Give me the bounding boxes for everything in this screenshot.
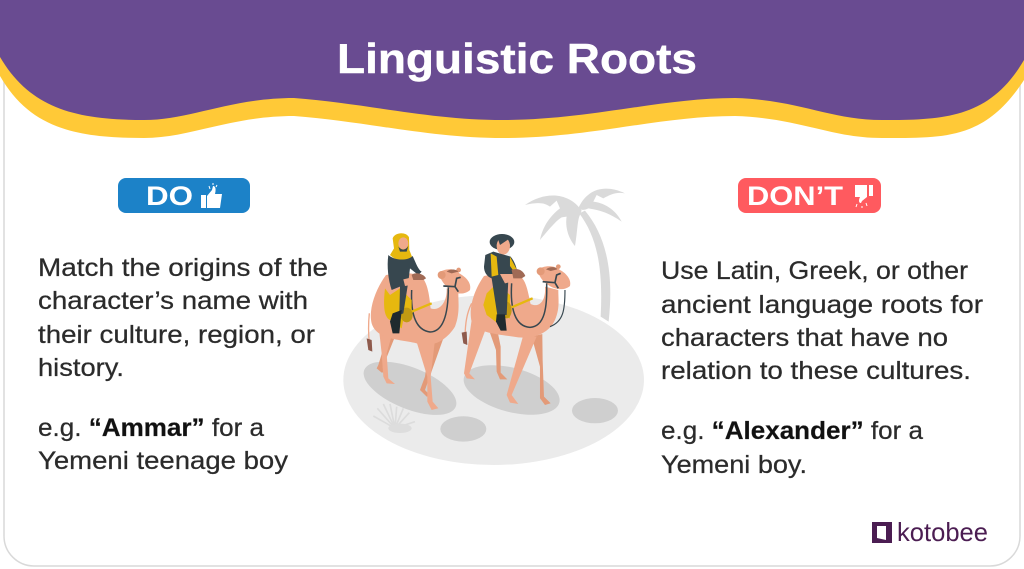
illustration: camel riders in the desert (343, 189, 644, 465)
don't text (661, 257, 983, 385)
palm tree (525, 189, 625, 322)
desert grass (373, 404, 415, 433)
don't text: relation to these cultures. (661, 357, 971, 385)
header wave (0, 0, 1024, 138)
rider left (388, 233, 426, 333)
don't example: e.g. “Alexander” for a (661, 417, 923, 445)
icon: book (872, 522, 892, 543)
do text: their culture, region, or (38, 321, 315, 349)
shadows and rocks (357, 351, 618, 442)
camel left (367, 268, 470, 410)
icon: thumbs up (201, 183, 222, 208)
don't example: Yemeni boy. (661, 451, 807, 479)
do example (38, 414, 289, 475)
title: Linguistic Roots (337, 35, 697, 82)
don't text: characters that have no (661, 324, 948, 352)
do example: e.g. “Ammar” for a (38, 414, 264, 442)
logo: kotobee: kotobee (897, 517, 988, 547)
don't text: Use Latin, Greek, or other (661, 257, 968, 285)
do text: Match the origins of the (38, 254, 328, 282)
panel: don't (661, 178, 983, 479)
don't badge (738, 178, 881, 213)
ground (343, 295, 644, 465)
do badge (118, 178, 250, 213)
do example: Yemeni teenage boy (38, 447, 289, 475)
panel: do (38, 178, 328, 475)
do text: history. (38, 354, 124, 382)
rider right (484, 234, 525, 331)
don't example (661, 417, 923, 479)
do text: character’s name with (38, 287, 308, 315)
don't text: ancient language roots for (661, 291, 983, 319)
don't badge: DON’T (747, 181, 844, 211)
do badge: DO (146, 181, 193, 211)
do text (38, 254, 328, 382)
icon: thumbs down (855, 185, 873, 208)
camel right (462, 264, 570, 405)
